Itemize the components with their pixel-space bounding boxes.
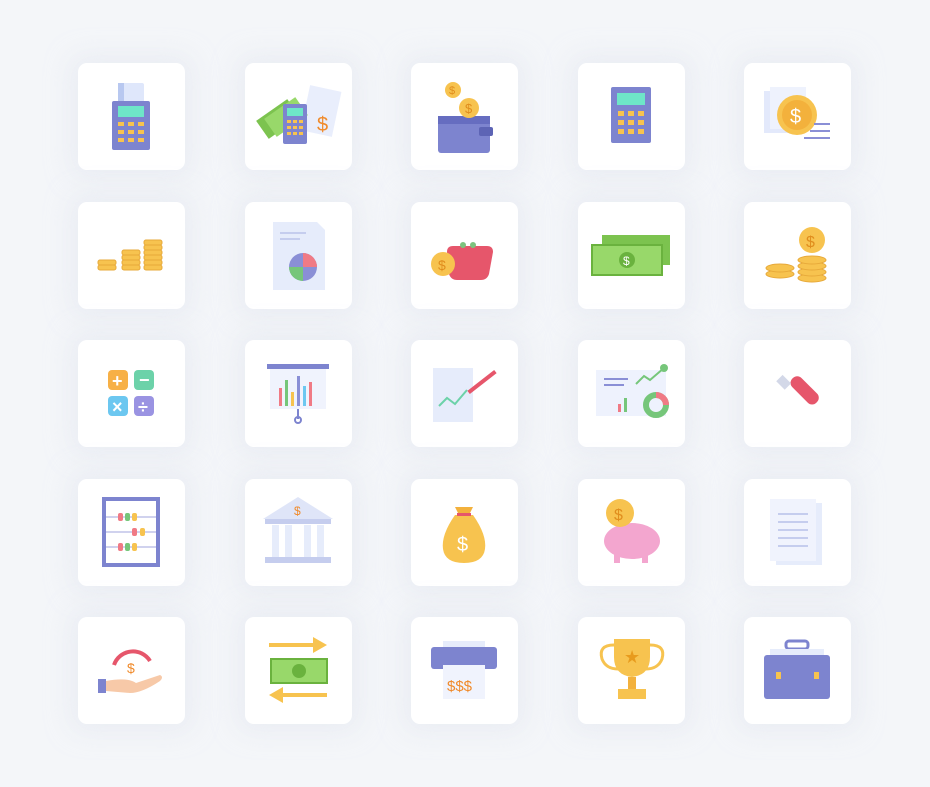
card: USB drive — [744, 340, 851, 447]
card: document with dollar coin: $ — [790, 106, 801, 128]
card: purse with coin: $ — [438, 257, 446, 273]
card: math operators — [78, 340, 185, 447]
card: wallet with coins — [411, 63, 518, 170]
card: calculator — [578, 63, 685, 170]
card: money, calculator and invoice: $ — [317, 114, 328, 136]
card: trophy: ★ — [624, 647, 640, 667]
card: purse with coin — [411, 202, 518, 309]
card: documents — [744, 479, 851, 586]
card: presentation bar chart — [245, 340, 352, 447]
card: coin stacks — [78, 202, 185, 309]
card: calculator with receipt — [78, 63, 185, 170]
card: math operators: + — [112, 371, 123, 391]
card: abacus — [78, 479, 185, 586]
card: printer with dollars — [411, 617, 518, 724]
card: money transfer arrows — [245, 617, 352, 724]
card: money, calculator and invoice — [245, 63, 352, 170]
card: wallet with coins: $ — [449, 85, 455, 97]
card: printer with dollars: $$$ — [447, 678, 473, 695]
card: analytics dashboard — [578, 340, 685, 447]
card: banknotes: $ — [623, 254, 630, 268]
card: wallet with coins: $ — [465, 101, 473, 116]
card: math operators: − — [139, 370, 150, 390]
card: document with pen — [411, 340, 518, 447]
card: trophy — [578, 617, 685, 724]
card: report with pie chart — [245, 202, 352, 309]
card: piggy bank — [578, 479, 685, 586]
card: coin pile: $ — [806, 234, 815, 251]
card: banknotes — [578, 202, 685, 309]
card: briefcase — [744, 617, 851, 724]
card: math operators: ÷ — [138, 397, 148, 417]
card: piggy bank: $ — [614, 507, 623, 524]
card: bank building: $ — [294, 504, 301, 518]
card: math operators: × — [112, 397, 123, 417]
card: hand receiving money — [78, 617, 185, 724]
card: money bag — [411, 479, 518, 586]
card: coin pile — [744, 202, 851, 309]
card: money bag: $ — [457, 534, 468, 556]
card: document with dollar coin — [744, 63, 851, 170]
card: hand receiving money: $ — [127, 660, 135, 676]
card: bank building — [245, 479, 352, 586]
